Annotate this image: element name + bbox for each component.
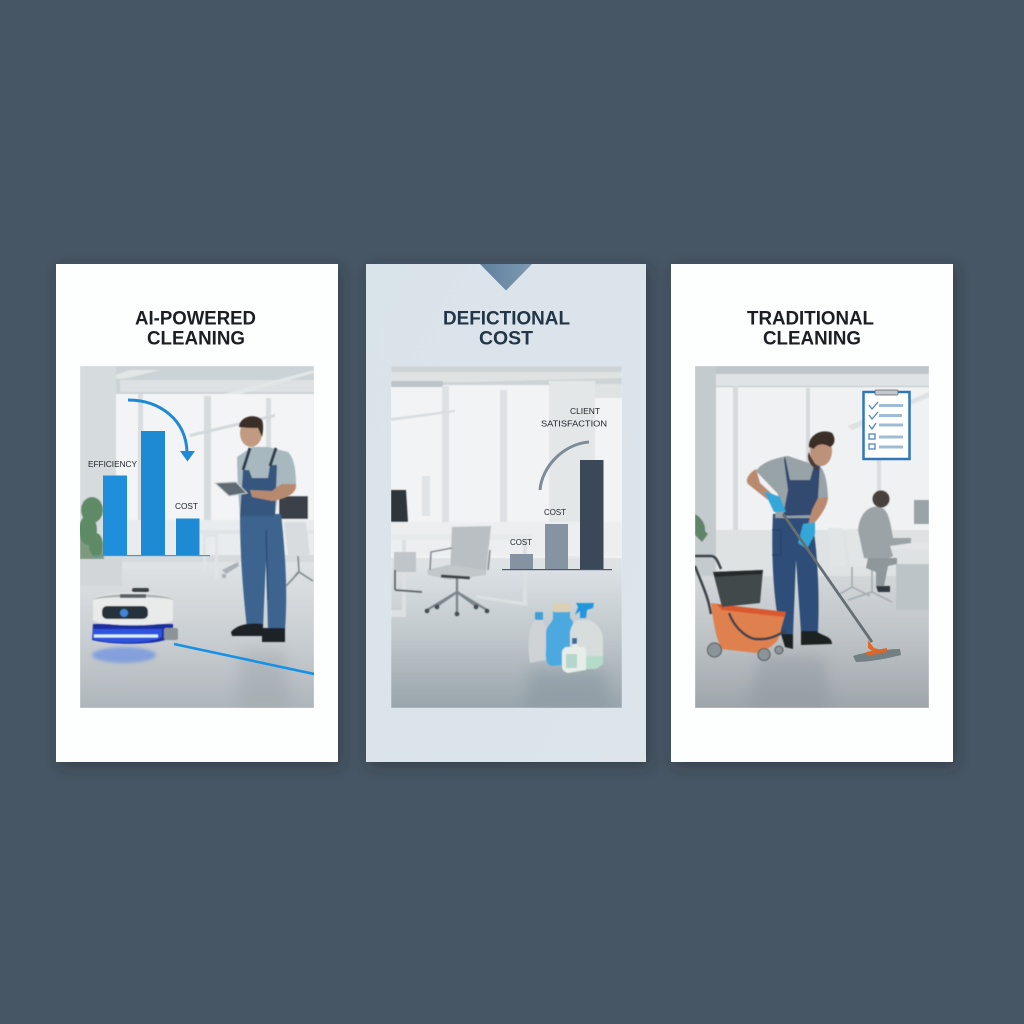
heading: deficitional cost bbox=[443, 308, 570, 350]
photo: office with cleaning bottles bbox=[391, 366, 622, 708]
photo: office with manual cleaner bbox=[695, 366, 929, 708]
heading: deficitional cost: DEFICTIONAL bbox=[443, 308, 570, 330]
heading: AI-powered cleaning: AI-POWERED bbox=[135, 308, 256, 330]
panel: deficitional cost bbox=[366, 264, 646, 762]
arc: trend curve bbox=[540, 442, 589, 490]
robot path line bbox=[174, 644, 314, 674]
marker triangle bbox=[480, 264, 532, 290]
heading: deficitional cost: COST bbox=[479, 328, 533, 350]
heading: AI-powered cleaning bbox=[135, 308, 256, 350]
panel: traditional cleaning bbox=[671, 264, 953, 762]
photo: office with robot cleaner bbox=[79, 366, 314, 708]
heading: AI-powered cleaning: CLEANING bbox=[147, 328, 245, 350]
label: efficiency: EFFICIENCY bbox=[88, 459, 137, 469]
label: cost upper: COST bbox=[544, 507, 566, 517]
mop bucket on wheels bbox=[695, 556, 786, 660]
mop bbox=[783, 514, 901, 662]
heading: traditional cleaning bbox=[747, 308, 874, 350]
worker with tablet bbox=[215, 416, 296, 642]
label: client satisfaction: SATISFACTION bbox=[541, 418, 607, 428]
cleaning bottles bbox=[528, 603, 603, 673]
bar chart: client satisfaction and cost bbox=[502, 406, 612, 570]
label: cost: COST bbox=[175, 501, 198, 511]
heading: traditional cleaning: TRADITIONAL bbox=[747, 308, 874, 330]
heading: traditional cleaning: CLEANING bbox=[763, 328, 861, 350]
label: client satisfaction: CLIENT bbox=[570, 406, 600, 416]
panel: AI-powered cleaning bbox=[56, 264, 338, 762]
label: cost lower: COST bbox=[510, 537, 532, 547]
seated office worker bbox=[858, 490, 911, 592]
label: client satisfaction bbox=[542, 408, 606, 426]
checklist clipboard bbox=[864, 390, 910, 459]
robot cleaner bbox=[92, 588, 178, 663]
bar chart: efficiency and cost bbox=[88, 400, 210, 556]
worker with mop bbox=[747, 431, 834, 649]
arrow: downward curve bbox=[128, 400, 195, 462]
